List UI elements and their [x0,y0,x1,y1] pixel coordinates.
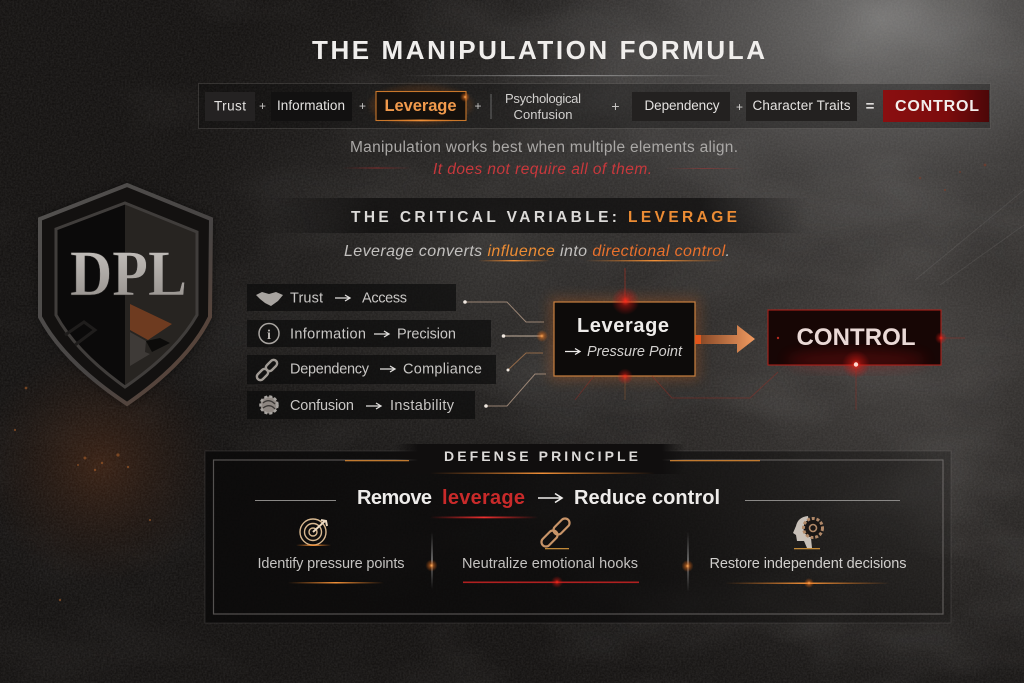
panel: formula bar: + [259,99,266,113]
box: control [768,310,947,378]
panel: formula bar: + [359,99,366,113]
faint network lines [575,338,965,410]
term: leverage: Leverage [384,97,456,115]
box: control: CONTROL [796,324,916,351]
row: trust to access: Trust [290,290,323,306]
arrow: leverage to control [695,325,755,353]
item: restore independent decisions [710,516,906,588]
icon: info circle [259,324,279,344]
panel: conversions [247,284,496,419]
item: restore independent decisions: Restore independent decisions [710,556,906,572]
panel: formula bar [198,84,990,128]
row: information to precision [247,320,491,347]
term: psychological confusion: Psychological [505,91,581,106]
connectors [463,300,548,408]
statement: remove leverage reduce control [255,487,900,518]
heading: critical variable [265,198,810,233]
heading: defense principle [345,444,760,474]
icon: tangled gear [260,396,278,414]
row: trust to access [247,284,456,311]
term: information: Information [277,98,345,113]
row: information to precision: Precision [397,326,456,342]
note: not all required: It does not require all of them. [433,161,652,178]
row: confusion to instability: Confusion [290,398,354,414]
term: trust [205,92,255,121]
panel: formula bar: = [866,98,875,115]
statement: remove leverage reduce control: Reduce control [574,487,720,509]
panel: formula bar: + [474,99,482,113]
term: trust: Trust [214,98,246,114]
term: psychological confusion: Confusion [514,107,572,122]
subtitle: leverage definition: Leverage converts influence into directional control. [344,243,730,260]
icon: target [300,519,327,545]
divider: left [426,532,438,589]
panel: formula bar: + [736,100,743,114]
item: neutralize emotional hooks [462,517,639,588]
box: leverage pressure point [550,268,699,384]
statement: remove leverage reduce control: leverage [442,487,525,509]
term: leverage [369,85,473,125]
result: control: CONTROL [895,98,979,115]
note: alignment: Manipulation works best when multiple elements align. [350,139,738,156]
row: dependency to compliance: Dependency [290,362,370,378]
icon: info circle: i [267,328,271,343]
term: dependency [632,92,730,121]
result: control [883,90,989,122]
row: dependency to compliance: Compliance [403,362,482,378]
panel: formula bar: + [611,98,620,114]
icon: head with gear [793,516,822,549]
panel: defense principle [205,444,951,623]
icon: handshake [256,292,283,306]
icon: broken chain [540,517,571,548]
row: dependency to compliance [247,355,496,384]
icon: DPL shield [40,185,211,404]
row: information to precision: Information [290,326,366,342]
term: psychological confusion [505,91,581,122]
row: confusion to instability: Instability [390,398,455,414]
item: neutralize emotional hooks: Neutralize emotional hooks [462,556,638,572]
term: character traits [746,92,857,121]
box: leverage pressure point: Leverage [577,315,669,337]
heading: critical variable: THE CRITICAL VARIABLE: LEVERAGE [351,209,737,226]
statement: remove leverage reduce control: Remove [357,487,432,509]
term: dependency: Dependency [644,98,720,113]
divider: right [682,532,694,592]
term: character traits: Character Traits [752,98,851,113]
icon: chain link [255,358,279,382]
item: identify pressure points: Identify pressure points [258,556,404,572]
heading: defense principle: DEFENSE PRINCIPLE [444,448,638,464]
box: leverage pressure point: Pressure Point [587,344,683,360]
row: trust to access: Access [362,290,407,306]
item: identify pressure points [258,519,404,584]
term: information [271,92,352,121]
title: THE MANIPULATION FORMULA [312,35,765,65]
row: confusion to instability [247,391,475,419]
icon: DPL shield: DPL [70,238,187,310]
